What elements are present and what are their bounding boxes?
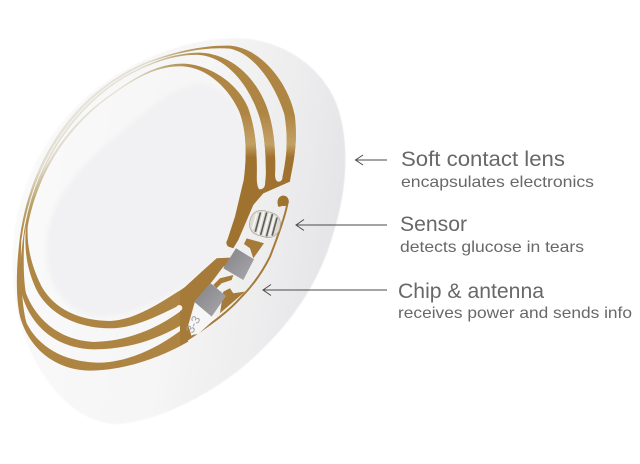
infographic: smart contact lens — [16, 38, 632, 423]
arrow: chip and antenna — [263, 284, 387, 296]
label: chip and antenna — [398, 280, 632, 322]
label: soft contact lens: Soft contact lens — [401, 148, 565, 171]
slit between lower rings — [175, 328, 180, 332]
sensor — [244, 208, 283, 258]
label: sensor: detects glucose in tears — [400, 239, 584, 256]
label notch with 3-3 — [183, 302, 217, 335]
contact lens illustration — [13, 38, 345, 424]
label: chip and antenna: Chip & antenna — [398, 280, 544, 303]
lens inner bowl — [46, 83, 248, 317]
slit between lower rings — [176, 305, 182, 311]
label: soft contact lens — [401, 148, 594, 191]
antenna bulb — [278, 196, 289, 207]
chip 2 — [194, 283, 245, 317]
upper junction of rings — [226, 173, 291, 248]
label: soft contact lens: encapsulates electronics — [401, 174, 594, 191]
gold ring: outer — [17, 46, 296, 371]
arrow: soft contact lens — [356, 155, 387, 165]
lens body — [13, 38, 345, 424]
gold ring: inner — [25, 64, 257, 328]
ring highlight — [242, 120, 296, 182]
chip 1 — [213, 248, 254, 288]
label: sensor: Sensor — [400, 213, 467, 236]
gold ring: middle — [20, 53, 275, 349]
antenna trace — [182, 202, 288, 343]
label notch with 3-3: 3-3 — [183, 313, 204, 335]
arrow: sensor — [296, 220, 387, 230]
lower junction of rings — [180, 258, 233, 345]
label: chip and antenna: receives power and sends info — [398, 305, 632, 322]
label: sensor — [400, 213, 584, 256]
